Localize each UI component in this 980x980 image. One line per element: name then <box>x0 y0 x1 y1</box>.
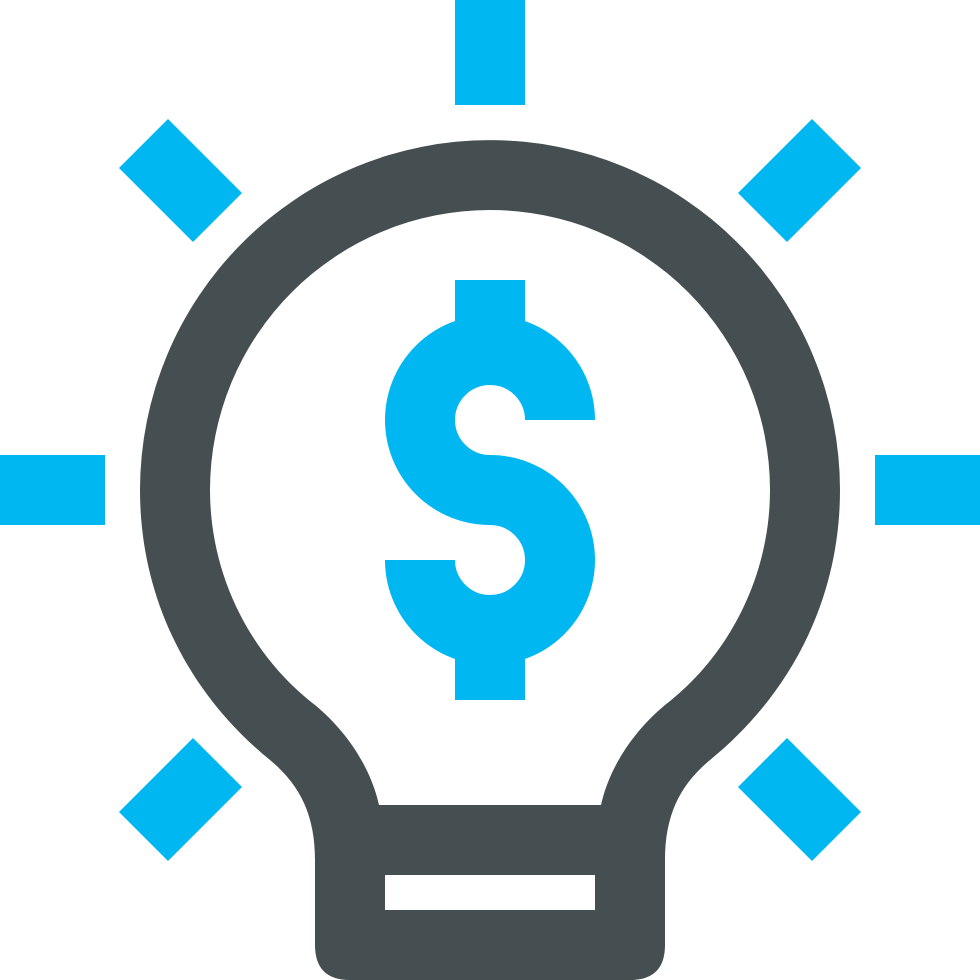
icon: dollar sign <box>420 280 560 700</box>
icon: light bulb outline <box>140 140 840 980</box>
